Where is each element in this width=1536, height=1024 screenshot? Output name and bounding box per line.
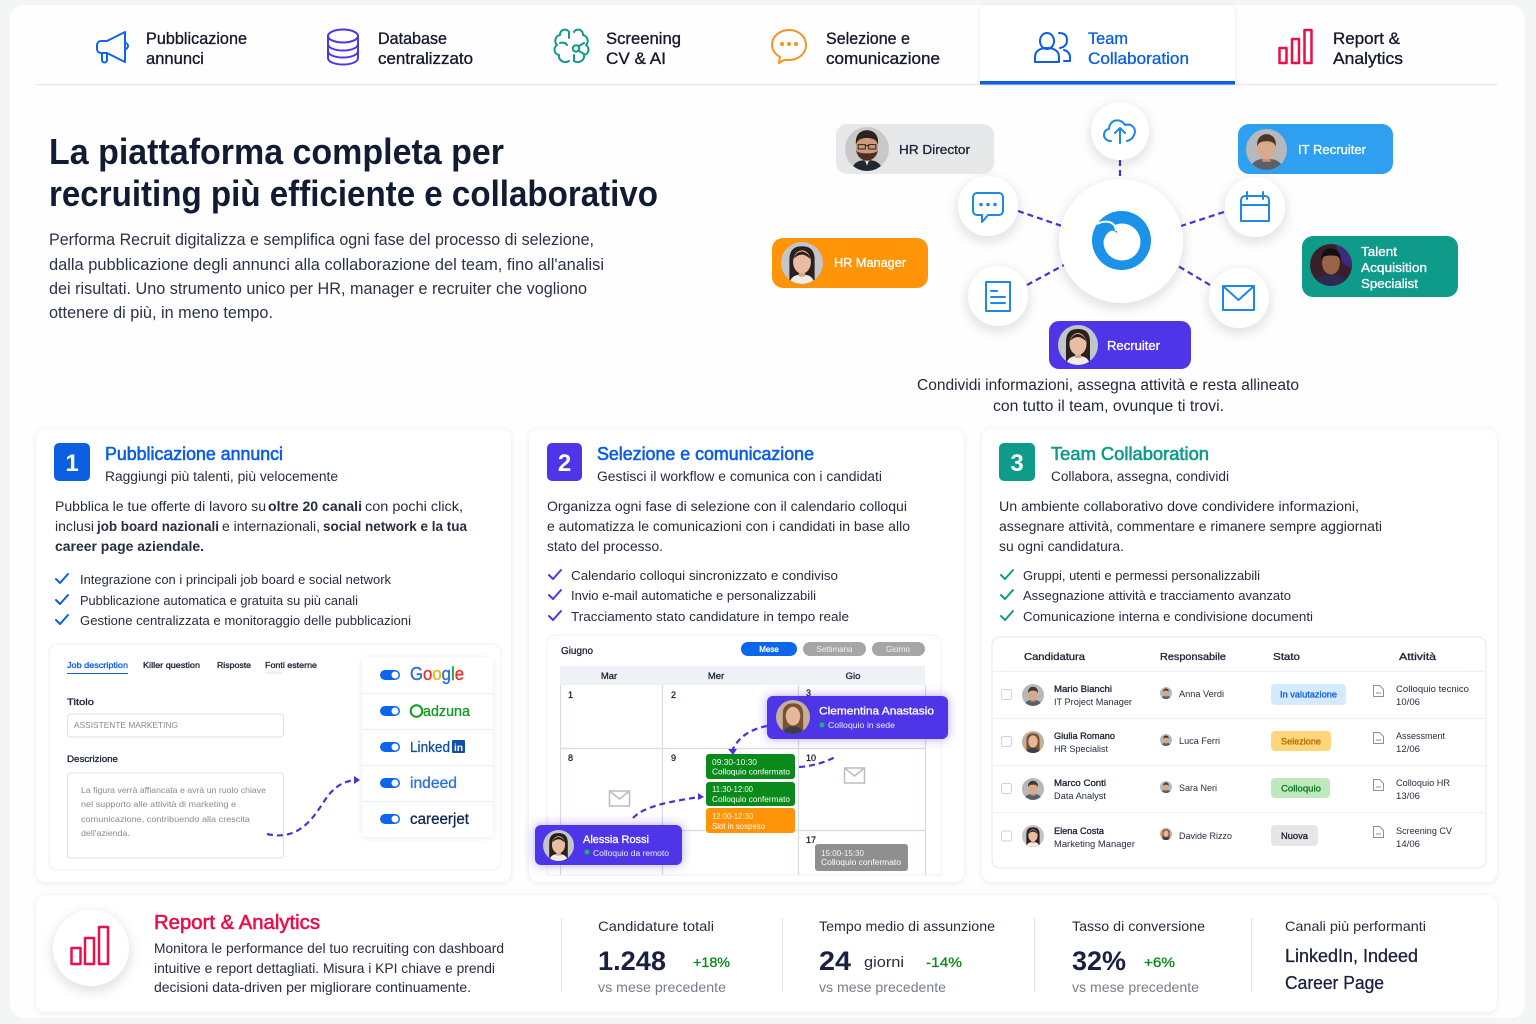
checklist: Invio e-mail automatiche e personalizzabili: [571, 588, 816, 603]
row: Marco Conti: Colloquio HR: [1396, 778, 1450, 789]
row: Marco Conti: Colloquio: [1281, 784, 1321, 794]
checklist: [56, 572, 411, 628]
KPI: Candidature totali: Candidature totali: [598, 918, 714, 934]
badge 1: [54, 443, 90, 481]
field: Descrizione: Descrizione: [67, 754, 118, 765]
description: e automatizza le comunicazioni con i candidati in base allo: [547, 518, 910, 534]
checklist: Gruppi, utenti e permessi personalizzabili: [1023, 568, 1260, 583]
row: Elena Costa: Screening CV: [1396, 826, 1453, 837]
description: social network e la tua: [323, 518, 467, 534]
date numbers: 3: [806, 688, 811, 698]
event: 12:00: 12:00-12:30: [712, 812, 754, 821]
row: Marco Conti: Data Analyst: [1054, 791, 1106, 802]
intro paragraph: [49, 231, 604, 322]
KPI: Candidature totali: +18%: [693, 954, 730, 970]
KPI: Tasso di conversione: vs mese precedente: [1072, 979, 1199, 995]
weekday header: Mar: [601, 671, 617, 682]
description: career page aziendale.: [55, 538, 204, 554]
icon: bars: [53, 910, 129, 986]
callout: Clementina Anastasio: [767, 696, 948, 739]
checklist: Assegnazione attività e tracciamento avanzato: [1023, 588, 1291, 603]
event: 11:30: [706, 782, 795, 806]
description: Monitora le performance del tuo recruiting con dashboard: [154, 940, 504, 956]
panel: Report & Analytics: [36, 895, 1497, 1012]
event: 11:30: Colloquio confermato: [712, 795, 791, 804]
row: Giulia Romano: 12/06: [1396, 744, 1420, 755]
row: Mario Bianchi: In valutazione: [1280, 690, 1337, 700]
description: job board nazionali: [96, 518, 219, 534]
job posting form: [49, 644, 501, 870]
field: Descrizione: [67, 754, 284, 858]
KPI: Tempo medio di assunzione: -14%: [926, 954, 962, 970]
weekday header: Mer: [708, 671, 724, 682]
logo: indeed: indeed: [410, 775, 457, 792]
tab: Selezione e comunicazione: Selezione e: [826, 30, 910, 48]
view switch: Mese: [759, 645, 779, 654]
KPI: Tempo medio di assunzione: giorni: [864, 954, 904, 971]
description: [999, 498, 1382, 554]
description: assegnare attività, commentare e rimanere sempre aggiornati: [999, 518, 1382, 534]
form tabs: Job description: [67, 660, 128, 670]
KPI: Tempo medio di assunzione: 24: [819, 946, 851, 976]
weekday header: Gio: [846, 671, 860, 682]
tab: Selezione e comunicazione: [772, 30, 940, 68]
event: 12:00: Slot in sospeso: [712, 822, 766, 831]
date numbers: 17: [806, 835, 816, 845]
calendar heading: Giugno: [561, 646, 593, 657]
checklist: Pubblicazione automatica e gratuita su più canali: [80, 593, 358, 608]
KPI: Tasso di conversione: Tasso di conversione: [1072, 918, 1205, 934]
badge 2: 2: [558, 450, 571, 477]
description: oltre 20 canali: [268, 498, 362, 514]
tab: Pubblicazione annunci: annunci: [146, 50, 204, 68]
icon: document: [968, 266, 1028, 326]
description: inclusi: [55, 518, 94, 534]
row: Elena Costa: 14/06: [1396, 839, 1420, 850]
description: [55, 498, 467, 554]
badge 3: 3: [1010, 450, 1024, 477]
event: 15:00: 15:00-15:30: [821, 849, 865, 858]
event: 09:30: [706, 754, 795, 779]
tab: Pubblicazione annunci: Pubblicazione: [146, 30, 247, 48]
icon: calendar: [1225, 177, 1285, 237]
tab: Database centralizzato: centralizzato: [378, 50, 473, 68]
subheading: Raggiungi più talenti, più velocemente: [105, 469, 338, 484]
heading: Selezione e comunicazione: [597, 444, 814, 464]
panel: Pubblicazione annunci: [36, 429, 511, 882]
role pill: Recruiter: Recruiter: [1107, 338, 1161, 353]
view switch: [741, 642, 925, 656]
field: Descrizione: nel supporto alle attività di marketing e: [81, 799, 236, 809]
callout: Clementina Anastasio: Clementina Anastasio: [819, 706, 934, 718]
description: Pubblica le tue offerte di lavoro su: [55, 498, 266, 514]
field: Titolo: ASSISTENTE MARKETING: [74, 720, 178, 730]
date numbers: 9: [671, 753, 676, 763]
candidates table: [992, 637, 1486, 868]
date numbers: 1: [568, 690, 573, 700]
row: Giulia Romano: Luca Ferri: [1179, 736, 1220, 747]
table header: Stato: [1273, 651, 1300, 663]
toggles: [380, 670, 400, 824]
checklist: [549, 568, 849, 624]
KPI: Canali più performanti: Career Page: [1285, 973, 1384, 993]
form tabs: Risposte: [217, 660, 251, 670]
heading: Report & Analytics: [154, 912, 320, 934]
view switch: Giorno: [886, 645, 911, 654]
role pill: HR Manager: [772, 238, 928, 288]
intro paragraph: dalla pubblicazione degli annunci alla collaborazione del team, fino all'analisi: [49, 256, 604, 274]
job boards list: [362, 657, 493, 837]
intro paragraph: ottenere di più, in meno tempo.: [49, 304, 273, 322]
role pill: HR Director: [836, 124, 994, 174]
role pill: IT Recruiter: IT Recruiter: [1298, 142, 1367, 157]
KPI: Tempo medio di assunzione: Tempo medio di assunzione: [819, 918, 995, 934]
badge 3: [999, 443, 1035, 481]
active tab underline: [980, 81, 1235, 84]
callout: Alessia Rossi: Alessia Rossi: [583, 834, 649, 846]
form tabs: Fonti esterne: [265, 660, 317, 670]
logo: adzuna: adzuna: [423, 703, 471, 720]
KPI: Tasso di conversione: 32%: [1072, 946, 1126, 976]
dashed connectors: [1018, 160, 1224, 285]
panel: Team Collaboration: [982, 429, 1497, 882]
tab: Selezione e comunicazione: comunicazione: [826, 50, 940, 68]
row: Mario Bianchi: 10/06: [1396, 697, 1420, 708]
view switch: Settimana: [816, 645, 853, 654]
role pill: Talent Acquisition Specialist: [1302, 236, 1458, 297]
checklist: Integrazione con i principali job board e social network: [80, 572, 391, 587]
tab: Pubblicazione annunci: [97, 30, 247, 68]
hub caption: con tutto il team, ovunque ti trovi.: [993, 398, 1224, 415]
tab: Report & Analytics: Report &: [1333, 30, 1400, 48]
form tabs: Killer question: [143, 660, 200, 670]
KPI: Candidature totali: [598, 918, 730, 995]
tab: Screening CV & AI: CV & AI: [606, 50, 666, 68]
row: Giulia Romano: [1002, 731, 1445, 755]
KPI: Candidature totali: 1.248: [598, 946, 666, 976]
heading: Pubblicazione annunci: [105, 444, 283, 464]
field: Descrizione: La figura verrà affiancata e avrà un ruolo chiave: [81, 785, 266, 795]
field: Descrizione: comunicazione, contribuendo alla crescita: [81, 814, 250, 824]
role pill: HR Director: HR Director: [899, 142, 971, 157]
role pill: HR Manager: HR Manager: [834, 255, 907, 270]
event: 12:00: [706, 808, 795, 833]
hub caption: [917, 377, 1299, 415]
role pill: Talent Acquisition Specialist: Acquisition: [1361, 260, 1427, 275]
KPI: Canali più performanti: LinkedIn, Indeed: [1285, 946, 1418, 966]
logo: Google: Google: [410, 664, 464, 684]
field: Descrizione: dell'azienda.: [81, 828, 130, 838]
event: 15:00: Colloquio confermato: [821, 858, 902, 867]
role pill: Recruiter: [1049, 321, 1191, 369]
title: [49, 131, 658, 214]
date numbers: [568, 688, 816, 845]
checklist: Gestione centralizzata e monitoraggio delle pubblicazioni: [80, 613, 411, 628]
KPI: Tasso di conversione: +6%: [1144, 954, 1175, 970]
active tab background: [980, 5, 1235, 84]
tab: Team Collaboration: Team: [1088, 30, 1128, 48]
date numbers: 8: [568, 753, 573, 763]
icon: mail placeholders: [610, 768, 864, 806]
row: Elena Costa: Davide Rizzo: [1179, 831, 1232, 842]
intro paragraph: Performa Recruit digitalizza e semplifica ogni fase del processo di selezione,: [49, 231, 594, 249]
row: Mario Bianchi: Anna Verdi: [1179, 689, 1224, 700]
description: e internazionali,: [222, 518, 320, 534]
KPI: Tempo medio di assunzione: [819, 918, 995, 995]
event: 11:30: 11:30-12:00: [712, 785, 754, 794]
description: intuitive e report dettagliati. Misura i KPI chiave e prendi: [154, 960, 495, 976]
tab: Screening CV & AI: Screening: [606, 30, 681, 48]
tab: Database centralizzato: Database: [378, 30, 447, 48]
callout: Alessia Rossi: Colloquio da remoto: [593, 849, 670, 858]
row: Elena Costa: Elena Costa: [1054, 826, 1105, 837]
row: Marco Conti: 13/06: [1396, 791, 1420, 802]
title: recruiting più efficiente e collaborativo: [49, 173, 658, 214]
tab: Database centralizzato: [328, 30, 473, 68]
KPI: Tasso di conversione: [1072, 918, 1205, 995]
icon: chat: [958, 176, 1018, 236]
KPI: Tempo medio di assunzione: vs mese precedente: [819, 979, 946, 995]
row: Mario Bianchi: Mario Bianchi: [1054, 684, 1112, 695]
table header: [1024, 651, 1436, 663]
hub caption: Condividi informazioni, assegna attività e resta allineato: [917, 377, 1299, 394]
title: La piattaforma completa per: [49, 131, 504, 172]
tab: Team Collaboration: [1035, 30, 1189, 68]
row: Giulia Romano: Giulia Romano: [1054, 731, 1115, 742]
badge 2: [547, 443, 582, 481]
icon: mail: [1209, 268, 1269, 328]
logo: LinkedIn: Linked: [410, 739, 450, 756]
event: 09:30: Colloquio confermato: [712, 768, 791, 776]
field: Titolo: Titolo: [67, 697, 94, 708]
subheading: Collabora, assegna, condividi: [1051, 469, 1229, 484]
row: Marco Conti: [1002, 778, 1450, 802]
description: stato del processo.: [547, 538, 663, 554]
row: Mario Bianchi: Colloquio tecnico: [1396, 684, 1469, 695]
field: Titolo: [67, 697, 284, 737]
form tabs: [67, 660, 317, 674]
logo: careerjet: careerjet: [410, 811, 470, 828]
description: decisioni data-driven per migliorare continuamente.: [154, 979, 471, 995]
KPI: Candidature totali: vs mese precedente: [598, 979, 726, 995]
row: Giulia Romano: Assessment: [1396, 731, 1445, 742]
callout: Clementina Anastasio: Colloquio in sede: [828, 721, 896, 730]
subheading: Gestisci il workflow e comunica con i candidati: [597, 469, 882, 484]
calendar: [535, 635, 948, 875]
row: Giulia Romano: HR Specialist: [1054, 744, 1108, 755]
tab: Report & Analytics: Analytics: [1333, 50, 1403, 68]
role pill: Talent Acquisition Specialist: Specialist: [1361, 276, 1418, 291]
date numbers: 2: [671, 690, 676, 700]
badge 1: 1: [65, 450, 79, 477]
intro paragraph: dei risultati. Uno strumento unico per HR, manager e recruiter che vogliono: [49, 280, 587, 298]
dashed arrow to job boards: [267, 776, 360, 835]
table header: Responsabile: [1160, 651, 1226, 663]
KPI: Canali più performanti: Canali più performanti: [1285, 918, 1426, 934]
logo: LinkedIn: in: [454, 743, 463, 754]
row: Elena Costa: [1002, 825, 1453, 850]
tab: Screening CV & AI: [555, 30, 681, 68]
date numbers: 10: [806, 753, 816, 763]
row: Mario Bianchi: [1002, 684, 1469, 708]
table header: Attività: [1399, 651, 1436, 663]
row: Mario Bianchi: IT Project Manager: [1054, 697, 1132, 708]
icon: cloud upload: [1091, 102, 1149, 160]
event: 09:30: 09:30-10:30: [712, 758, 758, 767]
checklist: Tracciamento stato candidature in tempo reale: [571, 609, 849, 624]
team collaboration hub diagram: [772, 102, 1458, 369]
role pill: Talent Acquisition Specialist: Talent: [1361, 244, 1397, 259]
checklist: Comunicazione interna e condivisione documenti: [1023, 609, 1313, 624]
table header: Candidatura: [1024, 651, 1085, 663]
description: su ogni candidatura.: [999, 538, 1124, 554]
description: Un ambiente collaborativo dove condividere informazioni,: [999, 498, 1359, 514]
description: [154, 940, 504, 995]
KPI: Canali più performanti: [1285, 918, 1426, 993]
row: Marco Conti: Marco Conti: [1054, 778, 1106, 789]
description: Organizza ogni fase di selezione con il calendario colloqui: [547, 498, 907, 514]
role pill: IT Recruiter: [1238, 124, 1393, 174]
callout: Alessia Rossi: [535, 825, 682, 865]
description: con pochi click,: [365, 498, 463, 514]
row: Elena Costa: Marketing Manager: [1054, 839, 1135, 850]
tab: Report & Analytics: [1280, 30, 1403, 68]
row: Elena Costa: Nuova: [1281, 831, 1309, 842]
tab: Team Collaboration: Collaboration: [1088, 50, 1189, 68]
panel: Selezione e comunicazione: [529, 429, 964, 882]
central logo: [1059, 179, 1183, 303]
description: [547, 498, 910, 554]
weekday header: [560, 666, 925, 685]
checklist: Calendario colloqui sincronizzato e condiviso: [571, 568, 838, 583]
heading: Team Collaboration: [1051, 444, 1209, 464]
checklist: [1001, 568, 1313, 624]
navigation tabs: [36, 5, 1497, 84]
event: 15:00: [815, 844, 908, 871]
row: Giulia Romano: Selezione: [1281, 736, 1321, 748]
row: Marco Conti: Sara Neri: [1179, 783, 1217, 794]
dashed arrows: [633, 726, 837, 818]
